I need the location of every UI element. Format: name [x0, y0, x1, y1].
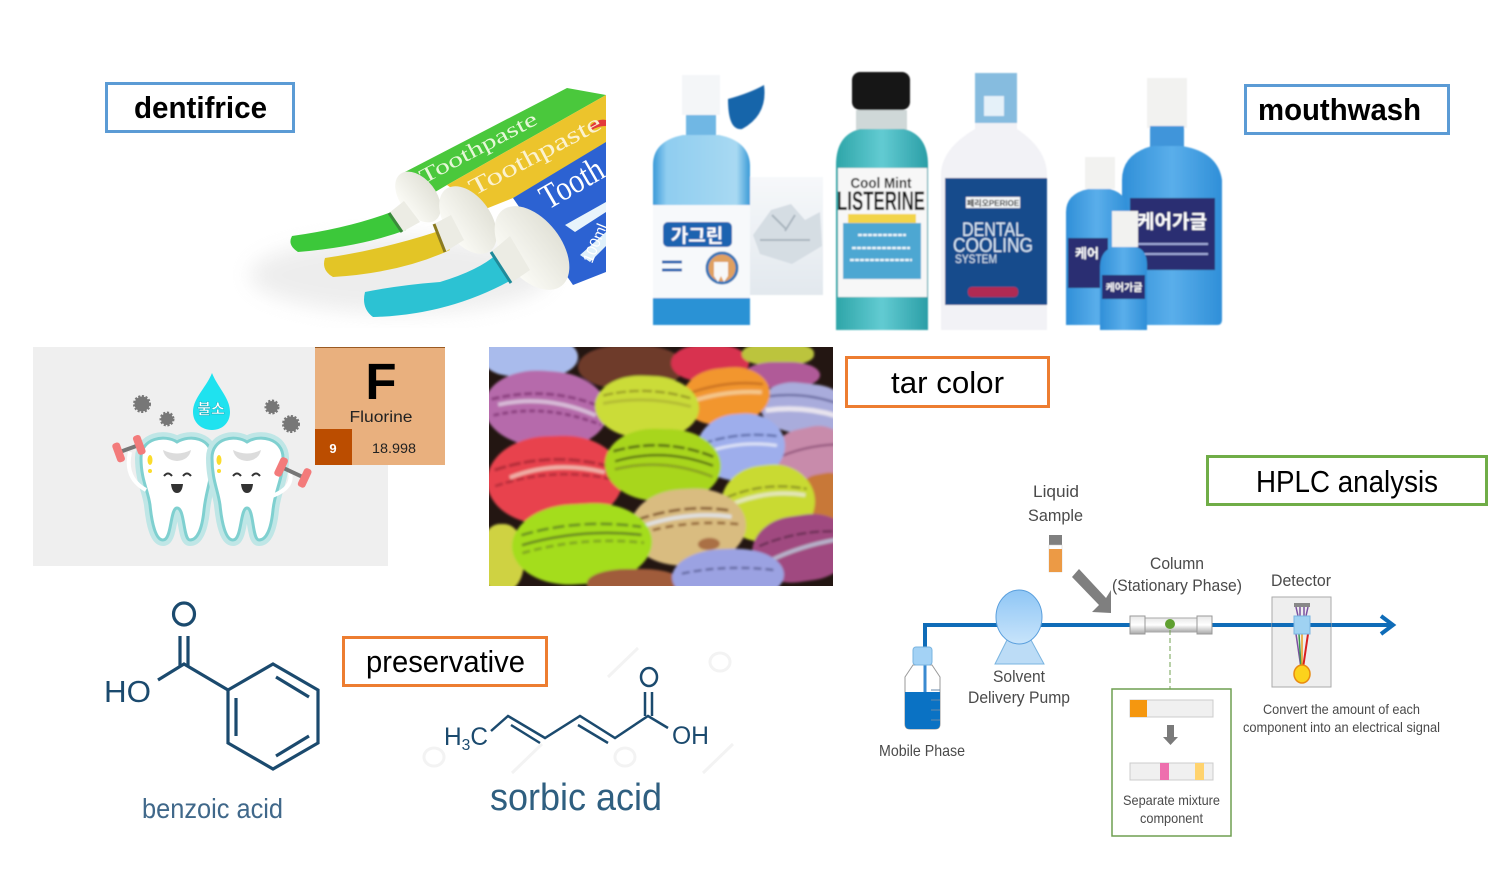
heading: preservative: preservative — [366, 644, 525, 679]
arrow: sample injection — [1072, 569, 1111, 613]
heading: dentifrice — [106, 84, 294, 132]
bottle: care gargle set: 케어가글 — [1137, 211, 1207, 233]
periodic table card: fluorine: 18.998 — [372, 440, 416, 456]
icon: fluoride drop: 불소 — [197, 401, 225, 418]
column — [1112, 554, 1242, 689]
heading: tar color — [846, 358, 1048, 406]
yellow tube: Toothpaste — [465, 110, 606, 201]
yellow tube — [324, 95, 606, 277]
bottle: dental cooling — [941, 73, 1047, 330]
blue tube — [364, 142, 611, 317]
solvent delivery pump — [968, 590, 1070, 707]
illustration: fluoride teeth — [33, 347, 388, 566]
text: detector note: component into an electrical signal — [1243, 719, 1440, 735]
icon: fluoride drop — [193, 373, 230, 430]
liquid sample: Liquid — [1033, 482, 1079, 501]
heading: mouthwash — [1246, 86, 1448, 134]
photo: toothpaste tubes — [250, 88, 611, 317]
green tube: Toothpaste — [415, 107, 541, 188]
periodic table card: fluorine: 9 — [329, 441, 337, 456]
mobile phase bottle — [879, 647, 965, 760]
chemical structure: sorbic acid: C — [470, 723, 488, 751]
panel: separation — [1112, 689, 1231, 836]
chemical structure: benzoic acid — [104, 603, 318, 824]
green tube — [290, 88, 606, 252]
panel: separation: component — [1140, 810, 1203, 826]
icon: right tooth — [212, 438, 313, 540]
diagram: HPLC system — [879, 482, 1440, 836]
heading: HPLC analysis — [1208, 456, 1486, 504]
column: (Stationary Phase) — [1112, 576, 1242, 595]
photo: mouthwash bottles — [653, 72, 1222, 330]
chemical structure: sorbic acid — [444, 668, 709, 819]
blue tube: 100ml — [580, 221, 611, 265]
icon: germs — [134, 396, 298, 432]
bottle: Listerine: Cool Mint — [850, 175, 912, 192]
heading: preservative — [344, 638, 546, 686]
photo: macarons — [489, 347, 833, 586]
bottle: care gargle set — [1066, 78, 1222, 330]
flow line with arrow — [925, 616, 1393, 665]
detector: Detector — [1271, 571, 1331, 590]
chemical structure: benzoic acid: benzoic acid — [142, 793, 283, 824]
text: detector note — [1243, 701, 1440, 735]
bottle: dental cooling: COOLING — [953, 235, 1033, 257]
bottle: care gargle set: 케어가글 — [1106, 281, 1142, 294]
bottle: gargle with glass: 가그린 — [671, 225, 723, 247]
bottle: Listerine — [836, 72, 928, 330]
panel: separation: Separate mixture — [1123, 792, 1220, 808]
chemical structure: benzoic acid: HO — [104, 674, 151, 709]
chemical structure: sorbic acid: H — [444, 723, 462, 751]
blue tube: Tooth — [532, 149, 611, 217]
bottle: dental cooling: DENTAL — [962, 220, 1024, 241]
detector — [1271, 571, 1331, 687]
chemical structure: sorbic acid: sorbic acid — [490, 777, 662, 819]
bottle: dental cooling: 페리오PERIOE — [967, 198, 1020, 208]
liquid sample: Sample — [1028, 506, 1083, 525]
bottle: Listerine: LISTERINE — [837, 186, 925, 216]
bottle: gargle with glass — [653, 75, 823, 325]
heading: mouthwash: mouthwash — [1258, 92, 1421, 127]
liquid sample — [1028, 482, 1083, 572]
periodic table card: fluorine — [315, 347, 445, 465]
mobile phase bottle: Mobile Phase — [879, 743, 965, 760]
chemical structure: sorbic acid: 3 — [462, 737, 470, 754]
bottle: care gargle set: 케어 — [1075, 246, 1099, 261]
column: Column — [1150, 554, 1204, 573]
chemical structure: sorbic acid: OH — [672, 722, 709, 750]
heading: HPLC analysis: HPLC analysis — [1256, 464, 1438, 499]
bottle: dental cooling: SYSTEM — [955, 252, 997, 266]
text: detector note: Convert the amount of each — [1263, 701, 1420, 717]
heading: dentifrice: dentifrice — [134, 90, 267, 125]
solvent delivery pump: Solvent — [993, 667, 1045, 686]
watermarks — [424, 648, 733, 773]
periodic table card: fluorine: F — [365, 353, 397, 410]
icon: left tooth — [111, 434, 212, 540]
periodic table card: fluorine: Fluorine — [350, 409, 412, 426]
heading: tar color: tar color — [891, 365, 1004, 400]
solvent delivery pump: Delivery Pump — [968, 688, 1070, 707]
